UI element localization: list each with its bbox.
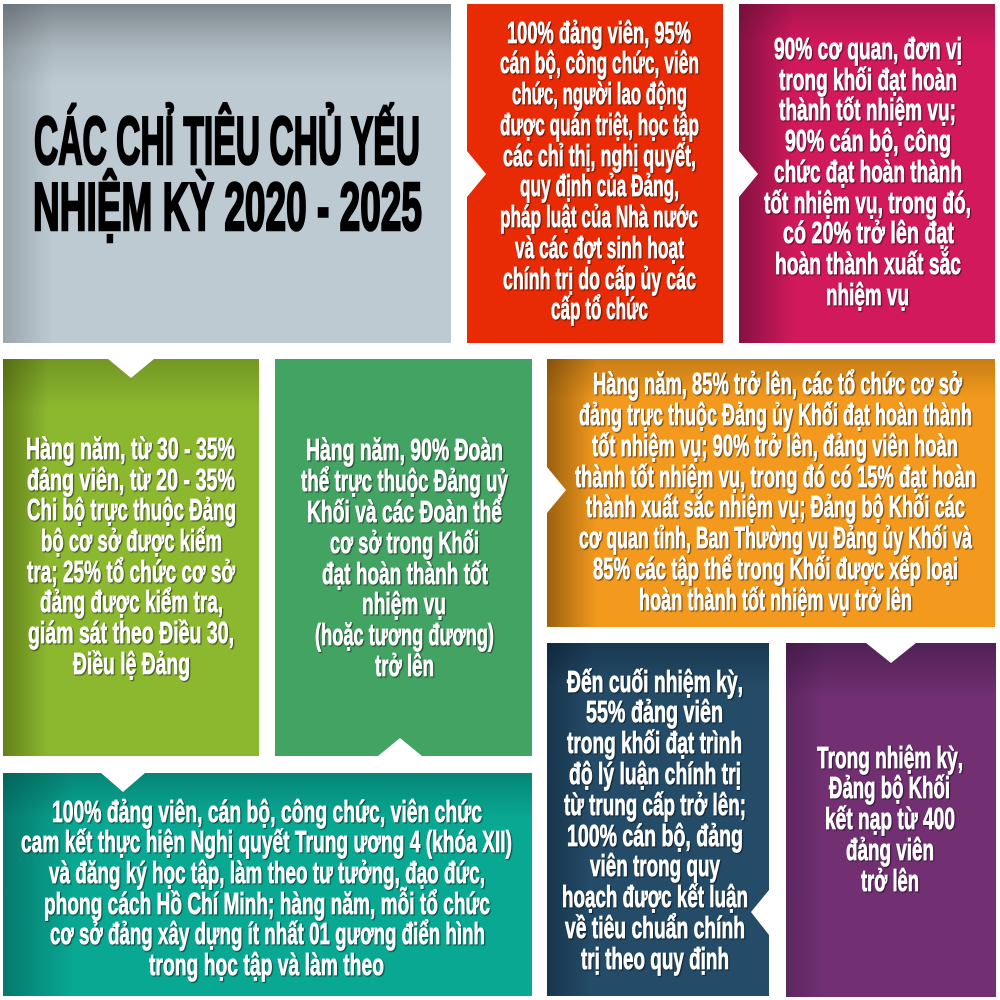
text: green panel body: Hàng năm, 90% Đoàn xyxy=(306,433,503,467)
text: green panel body: (hoặc tương đương) xyxy=(315,618,494,652)
text: lime panel body: đảng được kiểm tra, xyxy=(40,585,223,619)
text: teal panel body: và đăng ký học tập, làm theo tư tưởng, đạo đức, xyxy=(49,856,485,890)
text: red panel body: các chỉ thị, nghị quyết, xyxy=(503,139,696,173)
panel: orange grassroots target xyxy=(547,359,995,627)
text: navy panel body: 55% đảng viên xyxy=(586,695,723,729)
text: navy panel body: trị theo quy định xyxy=(581,942,729,976)
text: red panel body: được quán triệt, học tập xyxy=(500,108,699,142)
panel: lime inspection target xyxy=(3,359,259,756)
text: green panel body: thể trực thuộc Đảng uỷ xyxy=(301,464,508,498)
text: navy panel body xyxy=(562,665,749,978)
text: green panel body xyxy=(300,433,510,683)
text: orange panel body xyxy=(574,367,977,618)
text: red panel body: chức, người lao động xyxy=(512,77,687,111)
text: green panel body: đạt hoàn thành tốt xyxy=(322,557,488,591)
text: lime panel body: giám sát theo Điều 30, xyxy=(28,616,234,650)
text: purple panel body: đảng viên xyxy=(846,833,934,867)
panel: green mass organisation target xyxy=(275,359,532,756)
text: red panel body: và các đợt sinh hoạt xyxy=(515,231,684,265)
text: teal panel body: 100% đảng viên, cán bộ, công chức, viên chức xyxy=(52,795,482,829)
text: lime panel body: đảng viên, từ 20 - 35% xyxy=(27,463,235,497)
text: red panel body: cấp tổ chức xyxy=(551,292,648,326)
text: teal panel body: cam kết thực hiện Nghị quyết Trung ương 4 (khóa XII) xyxy=(21,825,512,859)
text: green panel body: nhiệm vụ xyxy=(362,587,446,621)
text: lime panel body: Chi bộ trực thuộc Đảng xyxy=(27,493,236,527)
text: navy panel body: 100% cán bộ, đảng xyxy=(567,819,743,853)
text: green panel body: Khối và các Đoàn thể xyxy=(307,495,502,529)
text: green panel body: trở lên xyxy=(375,649,434,683)
text: navy panel body: Đến cuối nhiệm kỳ, xyxy=(567,665,743,699)
text: purple panel body xyxy=(816,741,964,898)
panel: crimson task completion target xyxy=(739,4,995,343)
text: navy panel body: từ trung cấp trở lên; xyxy=(564,788,746,822)
text: teal panel body: cơ sở đảng xây dựng ít nhất 01 gương điển hình xyxy=(50,917,485,951)
heading: main title: CÁC CHỈ TIÊU CHỦ YẾU xyxy=(34,102,420,179)
text: navy panel body: trong khối đạt trình xyxy=(567,726,742,760)
text: red panel body: pháp luật của Nhà nước xyxy=(500,200,698,234)
text: teal panel body: trong học tập và làm theo xyxy=(149,948,384,982)
text: lime panel body: Hàng năm, từ 30 - 35% xyxy=(26,432,235,466)
text: navy panel body: viên trong quy xyxy=(590,849,720,883)
text: red panel body: chính trị do cấp ủy các xyxy=(503,262,696,296)
text: teal panel body: phong cách Hồ Chí Minh; hàng năm, mỗi tổ chức xyxy=(44,886,490,921)
panel: purple admission target xyxy=(786,643,996,997)
text: lime panel body: bộ cơ sở được kiểm xyxy=(41,524,222,558)
text: crimson panel body xyxy=(764,32,972,313)
text: red panel body: cán bộ, công chức, viên xyxy=(500,46,699,80)
heading: main title: NHIỆM KỲ 2020 - 2025 xyxy=(33,168,422,245)
panel: title xyxy=(3,4,451,343)
text: lime panel body: Điều lệ Đảng xyxy=(73,647,190,681)
text: navy panel body: về tiêu chuẩn chính xyxy=(565,911,745,945)
text: teal panel body xyxy=(21,795,513,984)
text: lime panel body: tra; 25% tổ chức cơ sở xyxy=(27,555,235,589)
text: lime panel body xyxy=(26,432,237,682)
text: navy panel body: độ lý luận chính trị xyxy=(569,757,741,791)
panel: teal commitment target xyxy=(3,773,532,996)
text: green panel body: cơ sở trong Khối xyxy=(330,526,479,560)
text: red panel body xyxy=(500,16,700,328)
panel: red party study target xyxy=(467,4,723,343)
text: navy panel body: hoạch được kết luận xyxy=(562,880,748,914)
text: red panel body: quy định của Đảng, xyxy=(520,169,679,203)
panel: navy political theory target xyxy=(547,643,769,996)
text: purple panel body: trở lên xyxy=(861,864,919,898)
text: red panel body: 100% đảng viên, 95% xyxy=(507,16,691,50)
heading: main title xyxy=(33,102,422,245)
text: crimson panel body: nhiệm vụ xyxy=(826,278,909,312)
